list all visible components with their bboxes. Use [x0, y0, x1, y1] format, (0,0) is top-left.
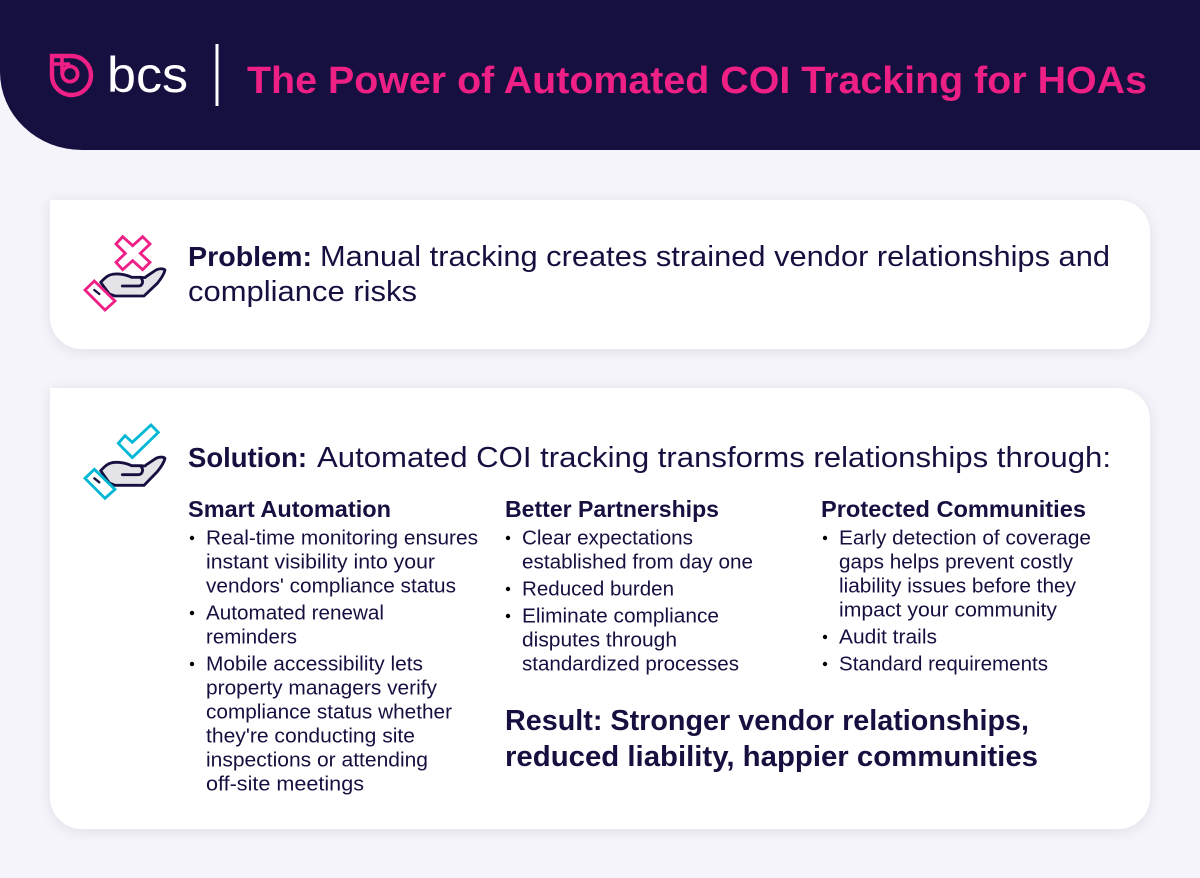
- column: better partnerships: Reduced burden: [522, 578, 674, 600]
- column: smart automation: reminders: [206, 626, 297, 648]
- icon: bcs logo mark: [52, 56, 91, 95]
- title: The Power of Automated COI Tracking for HOAs: [247, 60, 1147, 102]
- column: protected communities: liability issues before they: [839, 576, 1076, 598]
- column: protected communities: [821, 496, 1091, 676]
- column: smart automation: compliance status whether: [206, 702, 452, 724]
- result statement: [505, 705, 1038, 773]
- column: smart automation: Mobile accessibility lets: [206, 654, 423, 676]
- column: better partnerships: disputes through: [522, 630, 677, 652]
- icon: hand with check mark: [85, 425, 165, 498]
- column: smart automation: property managers verify: [206, 678, 437, 700]
- column: smart automation: Smart Automation: [188, 496, 391, 522]
- icon: hand with cross: [85, 237, 165, 310]
- result statement: Result: Stronger vendor relationships,: [505, 705, 1029, 737]
- column: better partnerships: Clear expectations: [522, 528, 693, 550]
- header banner: [0, 0, 1200, 150]
- problem statement: Problem:: [188, 241, 312, 272]
- column: protected communities: Standard requirements: [839, 654, 1048, 676]
- solution heading: Automated COI tracking transforms relationships through:: [317, 442, 1111, 474]
- column: smart automation: Real-time monitoring ensures: [206, 528, 478, 550]
- problem statement: compliance risks: [188, 276, 417, 308]
- result statement: reduced liability, happier communities: [505, 741, 1038, 773]
- column: smart automation: [188, 496, 478, 796]
- column: protected communities: gaps helps prevent costly: [839, 552, 1073, 574]
- column: smart automation: instant visibility into your: [206, 552, 435, 574]
- solution heading: Solution:: [188, 442, 307, 473]
- column: better partnerships: Better Partnerships: [505, 496, 719, 522]
- column: protected communities: Audit trails: [839, 626, 937, 648]
- logo wordmark: bcs: [107, 47, 188, 103]
- column: better partnerships: standardized processes: [522, 654, 739, 676]
- column: better partnerships: established from day one: [522, 552, 753, 574]
- column: protected communities: Early detection of coverage: [839, 528, 1091, 550]
- problem statement: [188, 241, 1110, 308]
- column: smart automation: off-site meetings: [206, 774, 364, 796]
- column: better partnerships: Eliminate compliance: [522, 606, 719, 628]
- column: smart automation: vendors' compliance status: [206, 576, 456, 598]
- column: smart automation: Automated renewal: [206, 602, 384, 624]
- column: protected communities: impact your community: [839, 600, 1057, 622]
- panel: solution: [50, 388, 1150, 829]
- column: better partnerships: [505, 496, 753, 676]
- column: protected communities: Protected Communities: [821, 496, 1086, 522]
- problem statement: Manual tracking creates strained vendor relationships and: [320, 241, 1110, 273]
- column: smart automation: they're conducting site: [206, 726, 415, 748]
- column: smart automation: inspections or attending: [206, 750, 428, 772]
- panel: problem: [50, 200, 1150, 349]
- logo divider: [216, 44, 218, 106]
